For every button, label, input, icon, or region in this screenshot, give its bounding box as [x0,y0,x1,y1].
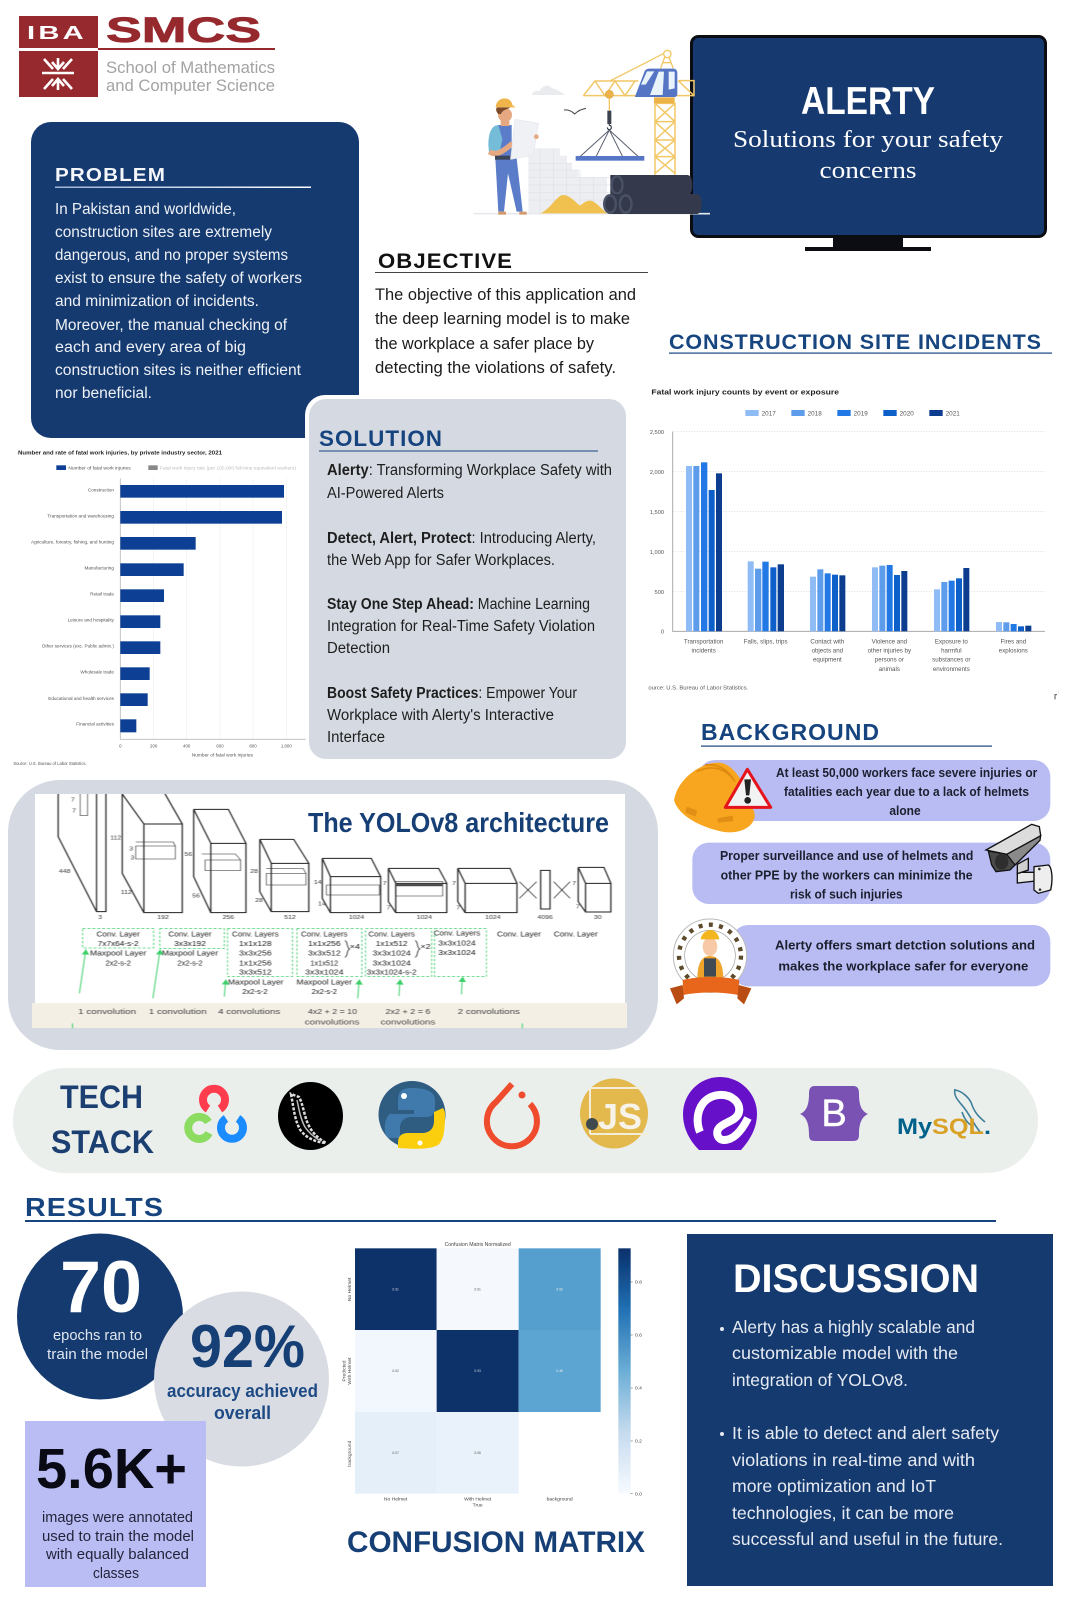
heatmap: confusion matrix: 0.91 [392,1287,399,1291]
icon: JavaScript: JS [598,1096,642,1137]
icon: Python [378,1081,446,1149]
stat: 5.6K+ images: with equally balanced [45,1546,189,1563]
diagram: YOLOv8 network layers: 1024 [485,915,501,921]
solution text: Interface [327,729,385,746]
bar chart: fatal work injuries by private industry sector: Fatal work injury rate (per 100,000 full-time equivalent workers) [160,465,297,470]
bar chart: fatal work injuries by private industry sector: 600 [216,744,224,749]
heatmap: confusion matrix: 0.48 [556,1369,563,1373]
bar chart: fatal work injuries by private industry sector [13,451,306,766]
bar chart: fatal work injury counts by event or exposure: environments [933,666,970,673]
bar chart: fatal work injuries by private industry sector: Source: U.S. Bureau of Labor Statistics. [13,761,87,766]
stat: 5.6K+ images: classes [93,1565,139,1582]
bar chart: fatal work injuries by private industry sector: Agriculture, forestry, fishing, and hunting [31,540,114,545]
problem text: dangerous, and no proper systems [55,247,288,264]
bar chart: fatal work injury counts by event or exposure: Transportation [684,638,724,645]
stat: 70 epochs: epochs ran to [53,1327,142,1344]
stat: 5.6K+ images: 5.6K+ [36,1437,187,1501]
diagram: YOLOv8 network layers: Conv. Layer [497,930,541,938]
bar chart: fatal work injuries by private industry sector: 0 [119,744,122,749]
diagram: YOLOv8 network layers: Conv. Layer [168,930,212,938]
bar chart: fatal work injuries by private industry sector: Financial activities [76,722,115,727]
solution text: Detection [327,640,390,657]
bar chart: fatal work injury counts by event or exposure: animals [879,666,900,673]
bar chart: fatal work injury counts by event or exposure: 500 [655,590,664,596]
diagram: YOLOv8 network layers: 30 [594,915,602,921]
diagram: YOLOv8 network layers: convolutions [381,1017,435,1026]
bar chart: fatal work injury counts by event or exposure: 1,500 [650,510,664,516]
bar chart: fatal work injury counts by event or exposure: 2,500 [650,430,664,436]
diagram: YOLOv8 network layers: convolutions [305,1017,359,1026]
heatmap: confusion matrix: 0.2 [635,1439,642,1445]
diagram: YOLOv8 network layers: 3x3x1024-s-2 [367,968,417,976]
heatmap: confusion matrix: Confusion Matrix Normalized [445,1242,511,1248]
diagram: YOLOv8 network layers: 512 [284,915,296,921]
diagram: YOLOv8 network layers: 3x3x1024 [438,939,476,947]
diagram: YOLOv8 network layers: 4 convolutions [218,1007,280,1016]
diagram: YOLOv8 network layers: 2x2-s-2 [106,959,131,967]
logo: IBA SMCS: IBA [27,23,87,43]
bar chart: fatal work injury counts by event or exposure: 2,000 [650,470,664,476]
diagram: YOLOv8 network layers: Conv. Layer [97,930,140,938]
icon: Flask [278,1082,343,1150]
diagram: YOLOv8 network layers: 3 [98,915,103,921]
diagram: YOLOv8 network layers: 56 [192,893,201,899]
bar chart: fatal work injuries by private industry sector: 1,000 [281,744,292,749]
diagram: YOLOv8 network layers: 112 [110,835,122,841]
callout: surveillance and PPE: Proper surveillance and use of helmets and [720,849,973,863]
heatmap: confusion matrix: 0.4 [635,1386,642,1392]
heading: objective: OBJECTIVE [378,250,513,273]
objective text: detecting the violations of safety. [375,359,616,377]
diagram: YOLOv8 network layers: 1024 [349,915,365,921]
icon: surveillance camera [986,824,1052,893]
bar chart: fatal work injuries by private industry sector: Manufacturing [84,566,114,571]
solution text: AI-Powered Alerts [327,485,444,502]
bar chart: fatal work injuries by private industry sector: Retail trade [90,592,114,597]
icon: Bootstrap [800,1086,868,1141]
logo: IBA SMCS: and Computer Science [106,77,275,95]
icon: purple logo [683,1077,757,1150]
solution text: Integration for Real-Time Safety Violation [327,618,595,635]
diagram: YOLOv8 network layers: 7 [71,797,75,803]
logo: IBA SMCS [19,11,275,97]
diagram: YOLOv8 network layers: 1024 [417,915,433,921]
bar chart: fatal work injuries by private industry sector: Educational and health services [48,696,115,701]
objective text: the deep learning model is to make [375,310,630,328]
discussion text: customizable model with the [732,1343,958,1363]
problem text: exist to ensure the safety of workers [55,270,302,287]
title panel: monitor: ALERTY [801,80,935,123]
callout: alerty smart detection: makes the workplace safer for everyone [778,959,1028,974]
diagram: YOLOv8 network layers: 3x3x192 [174,940,206,948]
icon: JavaScript [580,1078,648,1148]
diagram: YOLOv8 network layers: 7 [386,905,391,911]
discussion text: Alerty has a highly scalable and [732,1317,975,1337]
stat: 5.6K+ images [25,1421,206,1587]
callout: 50,000 workers: At least 50,000 workers face severe injuries or [776,766,1037,780]
bar chart: fatal work injury counts by event or exposure: incidents [692,648,716,655]
callout: alerty smart detection: Alerty offers smart detction solutions and [775,938,1035,953]
heatmap: confusion matrix: background [347,1440,353,1467]
heatmap: confusion matrix: 0.93 [474,1369,481,1373]
bar chart: fatal work injuries by private industry sector: 800 [249,744,257,749]
bar chart: fatal work injury counts by event or exposure: 2017 [762,410,776,417]
diagram: YOLOv8 network layers: 7 [383,881,387,887]
diagram: YOLOv8 network layers: Conv. Layers [434,929,480,937]
problem text: and minimization of incidents. [55,293,259,310]
callout: 50,000 workers: alone [889,804,921,818]
heatmap: confusion matrix: 0.07 [392,1451,399,1455]
diagram: YOLOv8 network layers: 28 [250,869,258,875]
heatmap: confusion matrix: With Helmet [464,1496,492,1502]
diagram: YOLOv8 network layers: 2x2-s-2 [242,988,268,996]
bar chart: fatal work injury counts by event or exposure: Contact with [810,638,845,645]
discussion text: It is able to detect and alert safety [732,1423,999,1443]
icon: Bootstrap: B [821,1093,847,1135]
diagram: YOLOv8 network layers: 1x1x512 [376,940,408,948]
objective text: The objective of this application and [375,286,636,304]
bar chart: fatal work injuries by private industry sector: Leisure and hospitality [68,618,115,623]
bar chart: fatal work injury counts by event or exposure: 0 [661,630,664,636]
diagram: YOLOv8 network layers: ×2 [420,943,431,951]
diagram: YOLOv8 network layers: Maxpool Layer [228,978,284,986]
heatmap: confusion matrix: background [547,1496,573,1502]
heatmap: confusion matrix: No Helmet [384,1496,408,1502]
callout: alerty smart detection [732,925,1050,986]
icon: MySQL: MySQL . [897,1114,991,1139]
diagram: YOLOv8 network layers: 3 [131,855,135,861]
solution text: the Web App for Safer Workplaces. [327,552,555,569]
diagram: YOLOv8 network layers: 112 [121,890,132,896]
bar chart: fatal work injury counts by event or exposure: Exposure to [935,638,968,645]
discussion text [720,1317,1003,1549]
diagram: YOLOv8 network layers: 14 [314,880,322,886]
diagram: YOLOv8 network layers: 2x2-s-2 [177,959,203,967]
problem text: Moreover, the manual checking of [55,317,288,334]
bar chart: fatal work injury counts by event or exposure: Fatal work injury counts by event or exposure [651,388,839,397]
icon: PyTorch [487,1084,537,1146]
objective text: the workplace a safer place by [375,335,595,353]
logo: IBA SMCS: SMCS [106,11,261,50]
diagram: YOLOv8 network layers: 448 [59,869,71,875]
solution text [327,462,612,746]
stat: 92% accuracy: overall [214,1403,271,1423]
stat: 92% accuracy: accuracy achieved [167,1381,318,1401]
title panel: monitor: concerns [820,157,916,184]
discussion text: violations in real-time and with [732,1450,975,1470]
diagram: YOLOv8 network layers: 4x2 + 2 = 10 [308,1007,357,1016]
diagram: YOLOv8 network layers: 7 [572,881,577,887]
bar chart: fatal work injury counts by event or exposure: 2019 [854,410,868,417]
stat: 92% accuracy: 92% [190,1313,305,1380]
diagram: YOLOv8 network layers: 1 convolution [149,1007,207,1016]
diagram: YOLOv8 network layers: Conv. Layer [554,930,598,938]
heading: YOLOv8 architecture: The YOLOv8 architecture [308,807,609,838]
diagram: YOLOv8 network layers: 7 [72,808,77,814]
callout: surveillance and PPE: other PPE by the workers can minimize the [721,868,973,882]
callout: 50,000 workers [698,760,1050,821]
diagram: YOLOv8 network layers: 3x3x1024 [372,949,411,957]
solution text: Stay One Step Ahead: Machine Learning [327,596,590,613]
diagram: YOLOv8 network layers: 7 [452,881,457,887]
problem text: each and every area of big [55,339,246,356]
bar chart: fatal work injuries by private industry sector: 400 [183,744,191,749]
callout: 50,000 workers: fatalities each year due to a lack of helmets [784,785,1029,799]
diagram: YOLOv8 network layers: 7x7x64-s-2 [98,940,139,948]
diagram: YOLOv8 network layers: 3x3x512 [308,949,341,957]
bar chart: fatal work injury counts by event or exposure: explosions [999,648,1028,655]
discussion text: technologies, it can be more [732,1503,954,1523]
solution text: Alerty: Transforming Workplace Safety with [327,462,612,479]
bar chart: fatal work injury counts by event or exposure: 2018 [808,410,822,417]
bar chart: fatal work injury counts by event or exposure: persons or [875,657,904,664]
logo: IBA SMCS: School of Mathematics [106,59,275,77]
heatmap: confusion matrix: Predicted [342,1360,348,1382]
diagram: YOLOv8 network layers: Conv. Layers [368,930,415,938]
bar chart: fatal work injury counts by event or exposure: Falls, slips, trips [744,638,788,645]
callout: surveillance and PPE [692,843,1050,904]
problem text: construction sites are extremely [55,224,272,241]
bar chart: fatal work injury counts by event or exposure: 2020 [900,410,914,417]
bar chart: fatal work injuries by private industry sector: Transportation and warehousing [47,514,114,519]
heading: problem: PROBLEM [55,164,166,185]
heading: solution: SOLUTION [319,426,443,451]
icon: OpenCV [188,1089,243,1139]
heading: tech stack [51,1079,154,1160]
diagram: YOLOv8 network layers: 1 convolution [78,1007,136,1016]
discussion text: successful and useful in the future. [732,1529,1003,1549]
bar chart: fatal work injuries by private industry sector: Other services (exc. Public admin.) [42,644,114,649]
heatmap: confusion matrix: 0.0 [635,1491,642,1497]
illustration: construction worker and crane [473,50,710,215]
title panel: monitor: Solutions for your safety [733,126,1004,153]
diagram: YOLOv8 network layers: Maxpool Layer [162,949,218,957]
bar chart: fatal work injuries by private industry sector: Number and rate of fatal work injuries, by private industry sector, 2021 [18,451,222,457]
heatmap: confusion matrix: No Helmet [347,1277,353,1301]
icon: helmet with warning sign [674,763,771,832]
diagram: YOLOv8 network layers: Conv. Layers [232,930,279,938]
bar chart: fatal work injury counts by event or exposure: Fires and [1000,638,1027,645]
diagram: YOLOv8 network layers: 3x3x512 [239,968,272,976]
heatmap: confusion matrix: 0.02 [392,1369,399,1373]
problem text: construction sites is neither efficient [55,362,302,379]
diagram: YOLOv8 network layers: 1x1x256 [239,959,272,967]
diagram: YOLOv8 network layers: 1x1x128 [239,940,272,948]
panel: YOLOv8 architecture [8,780,658,1050]
bar chart: fatal work injuries by private industry sector: 200 [150,744,158,749]
panel: objective [375,250,648,377]
diagram: YOLOv8 network layers: 1x1x256 [308,940,341,948]
diagram: YOLOv8 network layers: 3 [129,846,134,852]
stat: 70 epochs [17,1234,183,1400]
diagram: YOLOv8 network layers: Maxpool Layer [90,949,147,957]
heatmap: confusion matrix: 0.6 [635,1333,642,1339]
diagram: YOLOv8 network layers: 256 [223,915,235,921]
discussion text: more optimization and IoT [732,1476,936,1496]
heading: tech stack: STACK [51,1124,154,1160]
diagram: YOLOv8 network layers: 2x2-s-2 [312,988,337,996]
bar chart: fatal work injury counts by event or exposure: substances or [932,657,970,664]
diagram: YOLOv8 network layers: 56 [185,852,193,858]
heatmap: confusion matrix: True [473,1503,483,1509]
diagram: YOLOv8 network layers: 2x2 + 2 = 6 [386,1007,431,1016]
heatmap: confusion matrix: 0.01 [474,1287,481,1291]
icon: MySQL [897,1089,991,1139]
stat: 70 epochs: 70 [60,1247,142,1328]
panel: background [670,719,1052,1004]
heading: discussion: DISCUSSION [733,1257,979,1301]
bar chart: fatal work injury counts by event or exposure: 2021 [946,410,960,417]
heatmap: confusion matrix: With Helmet [347,1357,353,1385]
diagram: YOLOv8 network layers: Maxpool Layer [297,978,352,986]
bar chart: fatal work injuries by private industry sector: Number of fatal work injuries [68,465,131,470]
objective text [375,286,636,377]
solution text: Detect, Alert, Protect: Introducing Alerty, [327,530,596,547]
problem text: In Pakistan and worldwide, [55,201,236,218]
panel: solution [305,395,626,759]
diagram: YOLOv8 network layers [58,794,611,1028]
bar chart: fatal work injury counts by event or exposure [648,388,1059,699]
diagram: YOLOv8 network layers: 7 [576,904,580,910]
panel: tech stack [13,1068,1038,1173]
icon: worker badge [670,919,751,1004]
panel: discussion [687,1234,1053,1586]
bar chart: fatal work injuries by private industry sector: Construction [88,488,114,493]
heading: construction site incidents: CONSTRUCTION SITE INCIDENTS [669,330,1041,354]
stat: 5.6K+ images: images were annotated [42,1509,193,1526]
heatmap: confusion matrix [342,1242,642,1509]
diagram: YOLOv8 network layers: 3x3x256 [239,949,272,957]
diagram: YOLOv8 network layers: 3x3x1024 [305,968,344,976]
heatmap: confusion matrix: 0.06 [474,1451,481,1455]
solution text: Boost Safety Practices: Empower Your [327,685,577,702]
bar chart: fatal work injuries by private industry sector: Number of fatal work injuries [192,752,254,758]
heading: confusion matrix: CONFUSION MATRIX [347,1526,645,1559]
bar chart: fatal work injury counts by event or exposure: other injuries by [868,648,912,655]
problem text [55,201,302,402]
discussion text: integration of YOLOv8. [732,1370,908,1390]
diagram: YOLOv8 network layers: 3x3x1024 [372,959,411,967]
heading: results: RESULTS [25,1192,164,1222]
solution text: Workplace with Alerty's Interactive [327,707,554,724]
panel: problem [31,122,359,438]
diagram: YOLOv8 network layers: 192 [157,915,169,921]
bar chart: fatal work injury counts by event or exposure: harmful [941,648,962,655]
diagram: YOLOv8 network layers: Conv. Layers [301,930,348,938]
diagram: YOLOv8 network layers: ×4 [350,943,361,951]
heatmap: confusion matrix: 0.52 [556,1287,563,1291]
bar chart: fatal work injuries by private industry sector: Wholesale trade [80,670,114,675]
diagram: YOLOv8 network layers: 14 [318,901,326,907]
bar chart: fatal work injury counts by event or exposure: objects and [812,648,844,655]
bar chart: fatal work injury counts by event or exposure: Violence and [872,638,908,645]
diagram: YOLOv8 network layers: 2 convolutions [458,1007,520,1016]
stat: 92% accuracy [154,1292,329,1466]
stat: 5.6K+ images: used to train the model [42,1528,194,1545]
heading: background: BACKGROUND [701,719,880,745]
diagram: YOLOv8 network layers: 1x1x512 [310,959,339,967]
callout: surveillance and PPE: risk of such injuries [790,888,903,902]
problem text: nor beneficial. [55,385,152,402]
bar chart: fatal work injury counts by event or exposure: equipment [813,657,842,664]
diagram: YOLOv8 network layers: 3x3x1024 [438,949,476,957]
diagram: YOLOv8 network layers: 28 [255,898,263,904]
heatmap: confusion matrix: 0.8 [635,1280,642,1286]
diagram: YOLOv8 network layers: 4096 [537,915,553,921]
bar chart: fatal work injury counts by event or exposure: ource: U.S. Bureau of Labor Statistics. [648,685,748,691]
title panel: monitor [692,36,1046,251]
bar chart: fatal work injury counts by event or exposure: 1,000 [650,550,664,556]
heading: tech stack: TECH [60,1079,143,1115]
stat: 70 epochs: train the model [47,1346,148,1363]
diagram: YOLOv8 network layers: 7 [456,905,461,911]
